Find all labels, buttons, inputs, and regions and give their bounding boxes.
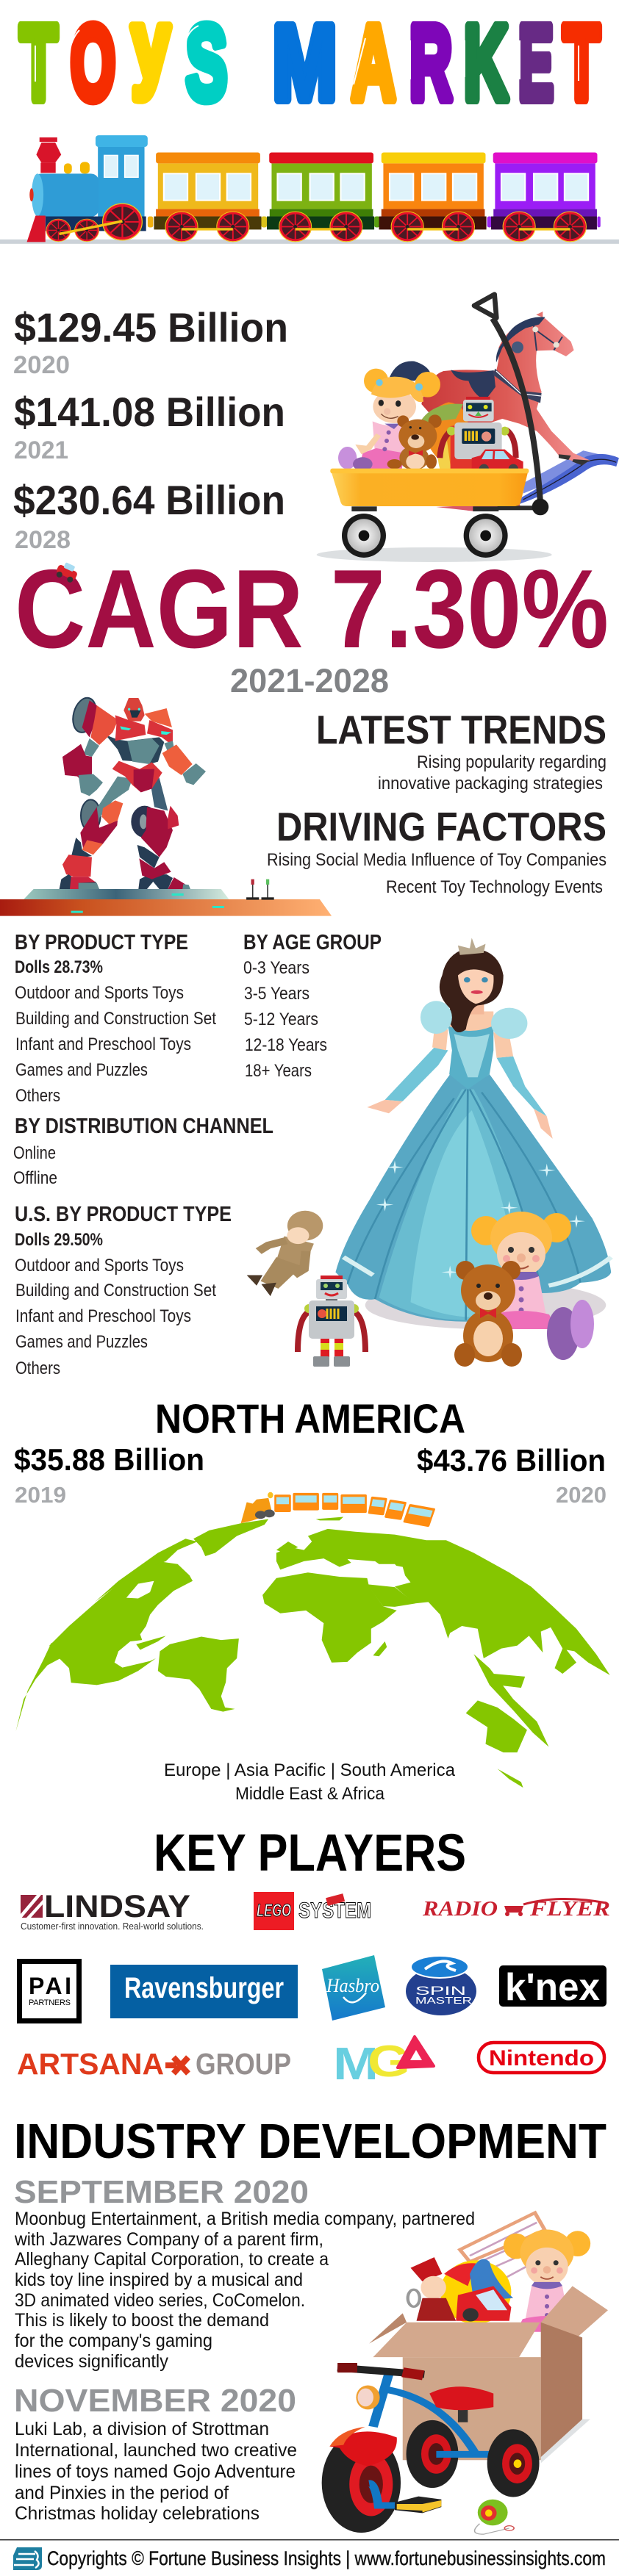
driving factors xyxy=(267,804,607,897)
segment: by product type: Others xyxy=(15,1086,60,1106)
carriage: orange roof xyxy=(154,152,267,242)
segment: by distribution channel: Online xyxy=(13,1143,56,1163)
segment: by age group: BY AGE GROUP xyxy=(243,931,382,954)
logo: K'Nex: k'nex xyxy=(505,1966,600,2009)
carriage: magenta roof xyxy=(491,152,601,242)
region heading: NORTH AMERICA xyxy=(155,1395,465,1442)
segment: by product type: Infant and Preschool Toys xyxy=(15,1035,191,1054)
title: K xyxy=(464,4,508,122)
icon: toy soldier xyxy=(247,1211,323,1296)
world map globe xyxy=(15,1517,610,1788)
logo: Lego System xyxy=(254,1892,371,1930)
wagon toy car xyxy=(472,450,523,474)
development: November 2020: and Pinxies in the period of xyxy=(15,2483,229,2503)
development: September 2020: SEPTEMBER 2020 xyxy=(14,2174,309,2210)
development: November 2020: lines of toys named Gojo Adventure xyxy=(15,2461,296,2482)
segment: by age group: 0-3 Years xyxy=(243,958,310,978)
segment: by distribution channel xyxy=(13,1115,273,1188)
segment: by age group: 18+ Years xyxy=(245,1061,312,1081)
logo: PAI Partners: PARTNERS xyxy=(29,1998,71,2007)
carriage: yellow roof xyxy=(379,152,492,242)
logo: Artsana Group xyxy=(17,2047,291,2081)
title: O xyxy=(71,4,115,122)
development: September 2020: for the company's gaming xyxy=(15,2331,212,2351)
logo: Hasbro: Hasbro xyxy=(326,1975,379,1996)
title: R xyxy=(409,4,452,122)
icon: toy robot xyxy=(298,1276,365,1367)
logo: Lindsay: LINDSAY xyxy=(44,1889,190,1924)
title: T xyxy=(20,4,57,122)
market value 2028 xyxy=(13,477,285,554)
footer logo xyxy=(13,2547,42,2570)
development: September 2020: Moonbug Entertainment, a British media company, partnered xyxy=(15,2209,475,2229)
logo: MGA: M xyxy=(333,2039,379,2090)
segment: by age group: 5-12 Years xyxy=(244,1010,318,1029)
development: November 2020: International, launched two creative xyxy=(15,2440,297,2461)
wagon teddy xyxy=(387,414,442,470)
icon: teddy bear xyxy=(454,1261,522,1367)
segment: by age group xyxy=(243,931,382,1081)
segment: U.S. by product type: Dolls 29.50% xyxy=(15,1230,103,1250)
logo: Lindsay: Customer-first innovation. Real-world solutions. xyxy=(21,1921,204,1932)
other regions: Europe | Asia Pacific | South America xyxy=(164,1760,456,1780)
segment: by distribution channel: Offline xyxy=(13,1168,57,1188)
key players heading: KEY PLAYERS xyxy=(154,1824,466,1882)
illustration: transformer robot on platform xyxy=(0,695,332,916)
other regions xyxy=(164,1760,456,1804)
logo: Lindsay xyxy=(21,1889,204,1932)
title: E xyxy=(518,4,554,122)
development: November 2020: Luki Lab, a division of Strottman xyxy=(15,2419,269,2439)
illustration: toy box and tricycle xyxy=(322,2213,608,2534)
logo: Spin Master: MASTER xyxy=(415,1995,472,2006)
logo: MGA: G xyxy=(368,2037,410,2086)
logo: Ravensburger xyxy=(110,1965,298,2018)
market value 2021: 2021 xyxy=(14,436,68,464)
development: September 2020: 3D animated video series, CoComelon. xyxy=(15,2290,305,2311)
segment: by product type: Building and Construction Set xyxy=(15,1009,216,1029)
carriage: red roof xyxy=(267,152,380,242)
segment: by distribution channel: BY DISTRIBUTION CHANNEL xyxy=(15,1115,273,1138)
logo: PAI Partners xyxy=(19,1962,79,2021)
illustration: wagon of toys with rocking horse xyxy=(317,295,619,562)
segment: U.S. by product type: Infant and Preschool Toys xyxy=(15,1306,191,1326)
segment: by product type xyxy=(15,931,216,1106)
logo: Radio Flyer: FLYER xyxy=(529,1898,610,1921)
title: S xyxy=(186,4,227,122)
logo: Spin Master: SPIN xyxy=(415,1984,466,1998)
north america value 2019 xyxy=(14,1442,204,1508)
north america value 2020: $43.76 Billion xyxy=(417,1443,606,1478)
locomotive xyxy=(27,135,153,242)
development: November 2020: Christmas holiday celebrations xyxy=(15,2503,260,2524)
logo: Ravensburger: Ravensburger xyxy=(124,1972,284,2004)
market value 2021: $141.08 Billion xyxy=(14,389,285,435)
logo: Lego System: SYSTEM xyxy=(298,1899,371,1923)
market value 2020: 2020 xyxy=(13,351,70,379)
market value 2020: $129.45 Billion xyxy=(14,304,288,350)
development: September 2020 xyxy=(14,2174,475,2372)
logo: PAI Partners: PAI xyxy=(29,1973,71,1999)
illustration: toy train xyxy=(0,135,619,244)
title xyxy=(20,0,600,122)
development: September 2020: devices significantly xyxy=(15,2351,168,2372)
market value 2021 xyxy=(14,389,285,464)
logo: MGA xyxy=(333,2037,434,2090)
segment: U.S. by product type: Building and Construction Set xyxy=(15,1281,216,1300)
development: November 2020: NOVEMBER 2020 xyxy=(14,2383,296,2419)
title: A xyxy=(351,4,396,122)
title: M xyxy=(273,4,337,122)
icon: small toy car xyxy=(54,560,80,584)
segment: U.S. by product type: Games and Puzzles xyxy=(15,1332,148,1352)
segment: U.S. by product type xyxy=(15,1203,232,1378)
segment: U.S. by product type: Outdoor and Sports Toys xyxy=(15,1256,184,1276)
segment: U.S. by product type: Others xyxy=(15,1359,60,1378)
development: September 2020: Alleghany Capital Corporation, to create a xyxy=(15,2249,329,2270)
market value 2020 xyxy=(13,304,288,379)
logo: Artsana Group: GROUP xyxy=(196,2047,291,2081)
north america value 2019: 2019 xyxy=(15,1482,66,1508)
segment: by product type: BY PRODUCT TYPE xyxy=(15,931,188,954)
latest trends: innovative packaging strategies xyxy=(378,774,603,794)
other regions: Middle East & Africa xyxy=(235,1784,385,1804)
north america value 2020: 2020 xyxy=(556,1482,607,1508)
icon: seated doll xyxy=(471,1212,594,1360)
wagon doll xyxy=(338,369,440,471)
segment: by product type: Dolls 28.73% xyxy=(15,957,103,977)
logo: Nintendo: Nintendo xyxy=(489,2046,594,2070)
logo: Radio Flyer xyxy=(422,1898,610,1921)
development: September 2020: This is likely to boost the demand xyxy=(15,2310,269,2331)
logo: Lego System: LEGO xyxy=(257,1901,291,1921)
logo: Nintendo xyxy=(479,2043,604,2073)
logo: Artsana Group: ARTSANA xyxy=(17,2047,164,2081)
development: September 2020: with Jazwares Company of a parent firm, xyxy=(14,2229,323,2250)
logo: Hasbro xyxy=(322,1955,385,2021)
wagon robot xyxy=(440,397,516,459)
segment: by age group: 3-5 Years xyxy=(244,984,310,1004)
north america value 2019: $35.88 Billion xyxy=(14,1442,204,1477)
logo: Spin Master xyxy=(406,1956,476,2015)
development: September 2020: kids toy line inspired by a musical and xyxy=(15,2270,303,2290)
development: November 2020 xyxy=(14,2383,297,2524)
market value 2028: $230.64 Billion xyxy=(13,477,285,523)
CAGR period: 2021-2028 xyxy=(230,662,389,699)
segment: by product type: Games and Puzzles xyxy=(15,1060,148,1080)
north america value 2020 xyxy=(417,1443,607,1508)
segment: by product type: Outdoor and Sports Toys xyxy=(15,983,184,1003)
latest trends xyxy=(316,707,607,794)
illustration: princess doll xyxy=(335,938,611,1329)
segment: U.S. by product type: U.S. BY PRODUCT TYPE xyxy=(15,1203,232,1226)
icon: mini train on globe xyxy=(241,1492,435,1527)
market value 2028: 2028 xyxy=(15,526,71,554)
logo: Radio Flyer: RADIO xyxy=(422,1898,498,1921)
segment: by age group: 12-18 Years xyxy=(245,1035,327,1055)
